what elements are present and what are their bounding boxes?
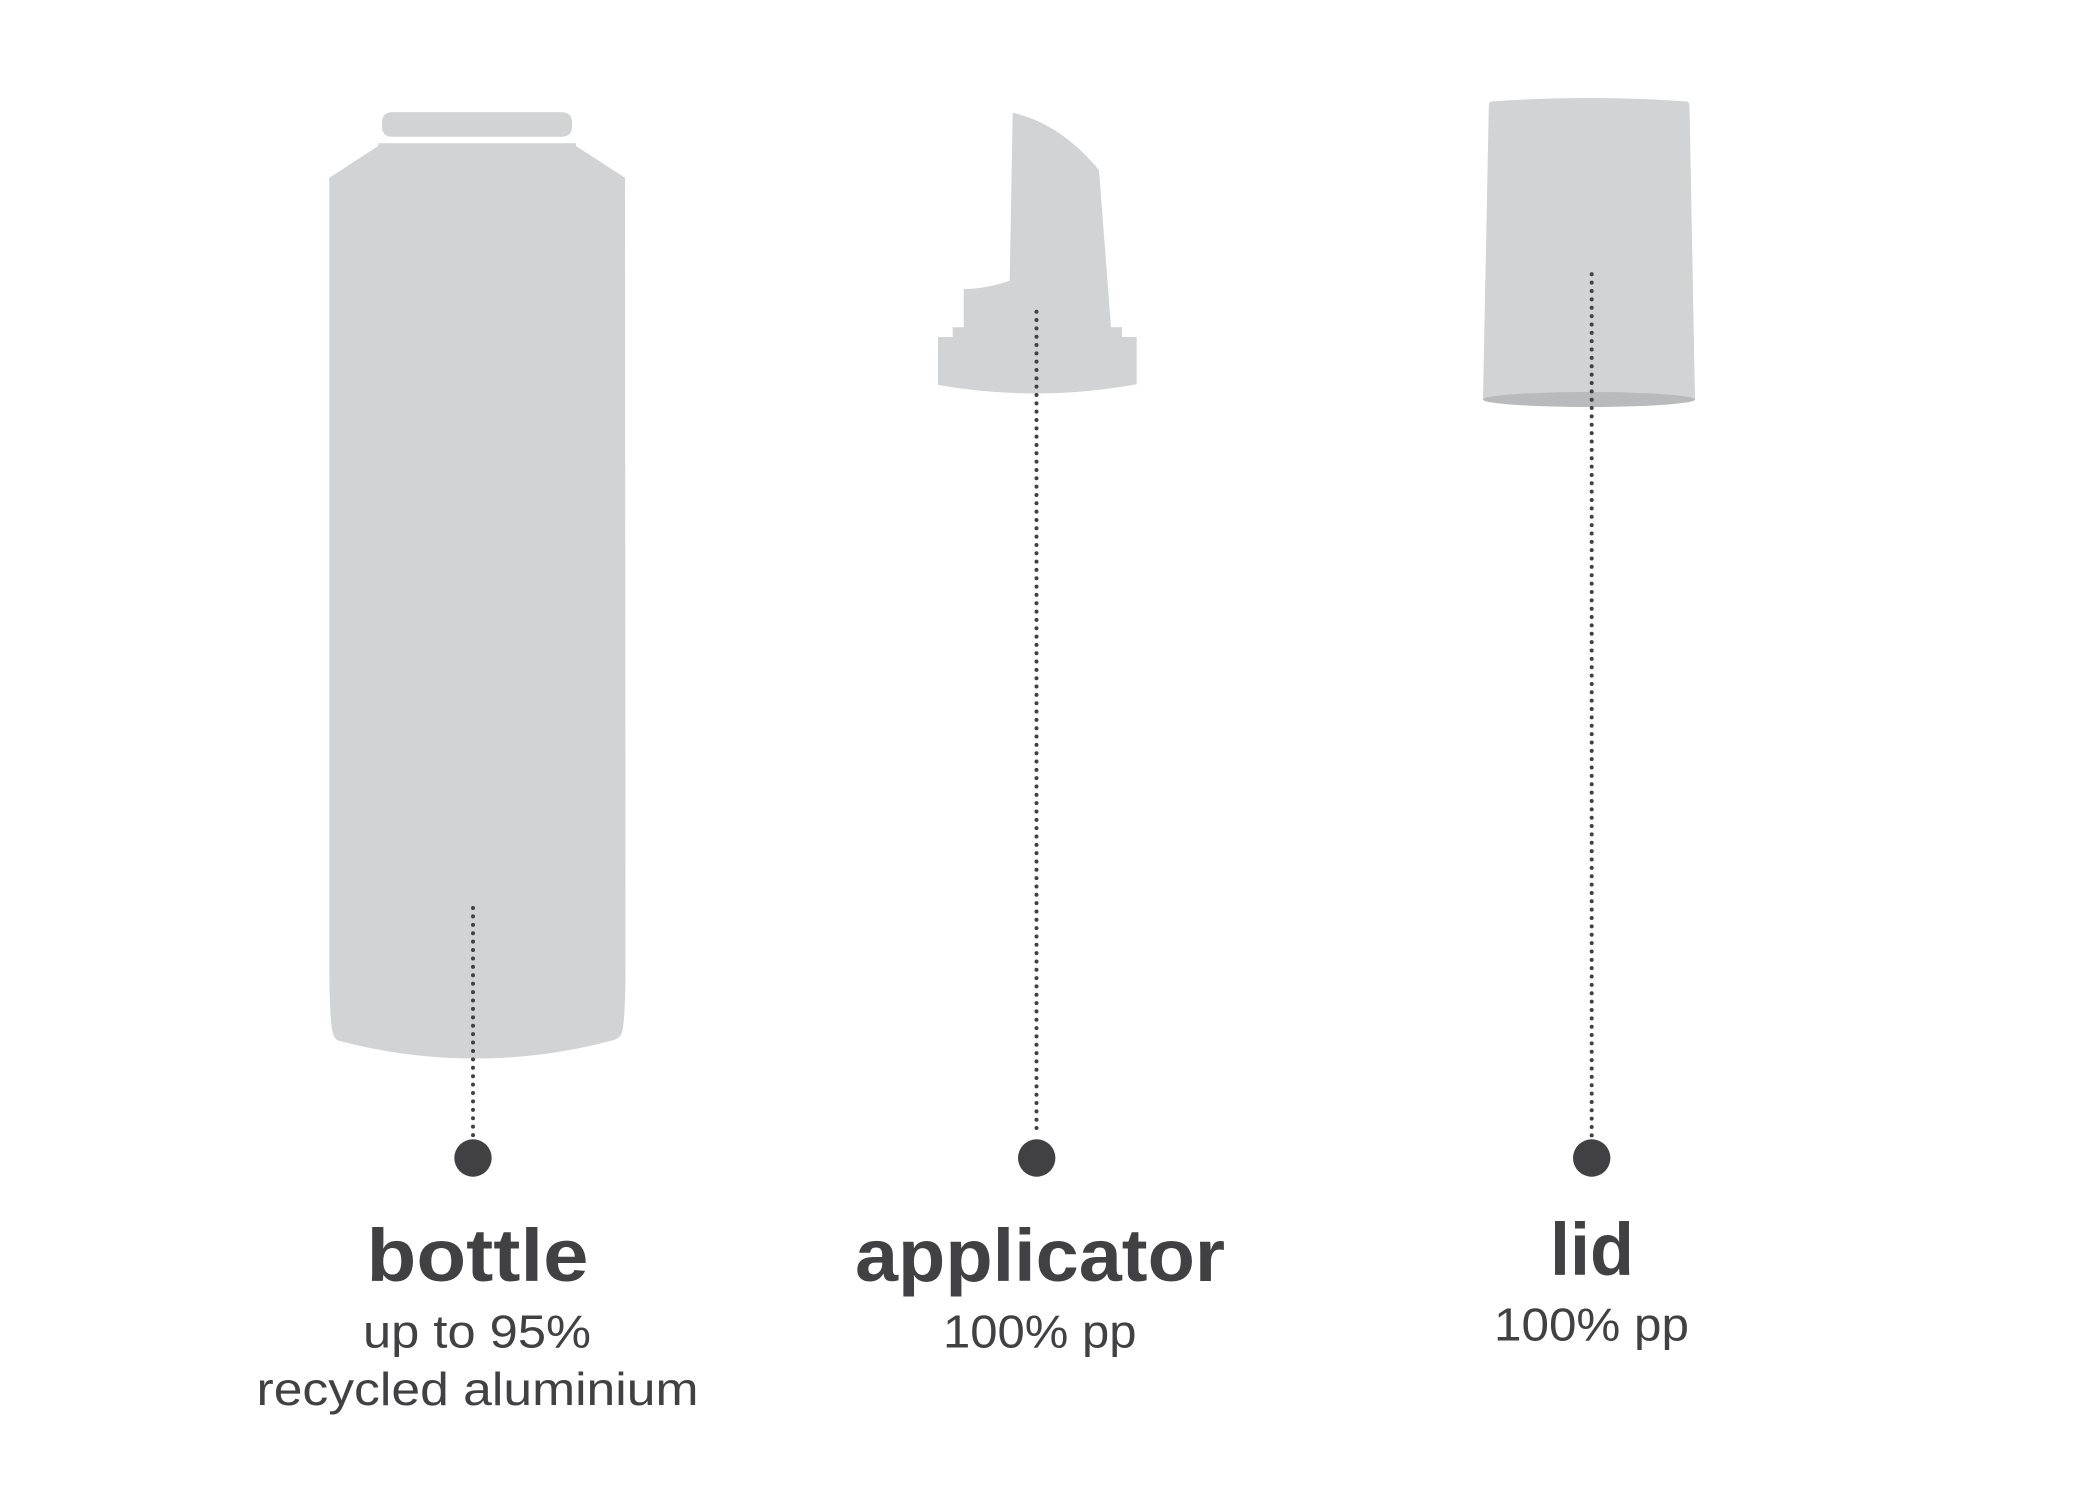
text: 100% pp: 100% pp — [943, 1306, 1136, 1358]
icon: lid silhouette — [1483, 98, 1695, 407]
label: applicator: applicator — [855, 1214, 1225, 1297]
label: lid: lid — [1550, 1208, 1634, 1291]
label: bottle: bottle — [366, 1214, 588, 1297]
text: 100% pp: 100% pp — [1494, 1298, 1689, 1350]
text: up to 95%: up to 95% — [363, 1306, 591, 1358]
panel: applicator — [855, 113, 1225, 1358]
leader line: bottle — [454, 908, 492, 1177]
leader line: applicator — [1018, 312, 1055, 1177]
text: recycled aluminium: recycled aluminium — [256, 1363, 698, 1415]
icon: applicator silhouette — [938, 113, 1137, 393]
panel: lid — [1483, 98, 1695, 1350]
icon: bottle silhouette — [329, 112, 626, 1059]
leader line: lid — [1573, 274, 1610, 1177]
panel: bottle — [256, 112, 698, 1415]
